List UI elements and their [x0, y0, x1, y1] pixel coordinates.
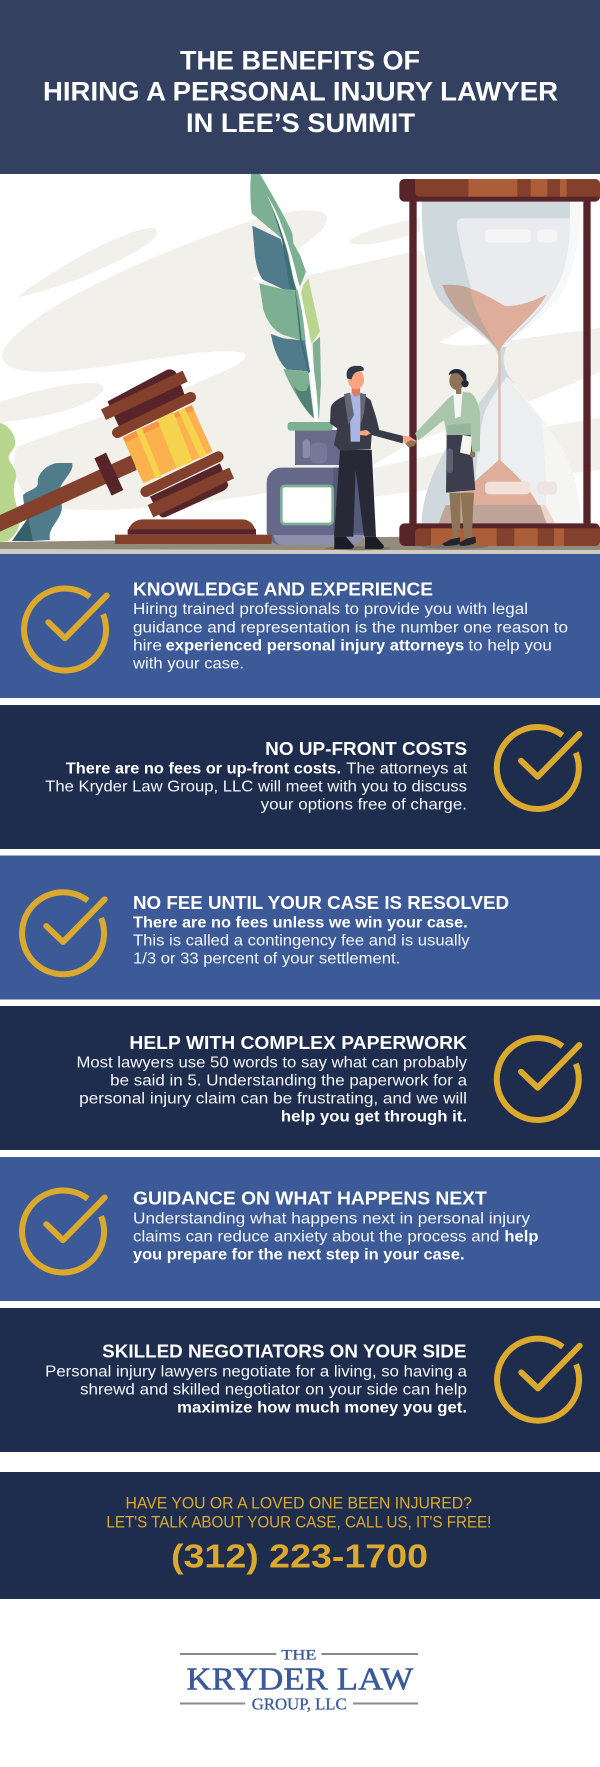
panel text [76, 1033, 467, 1125]
panel text: Personal injury lawyers negotiate for a living, so having a [45, 1363, 467, 1380]
call to action text [106, 1493, 491, 1531]
glass bulb [422, 202, 580, 523]
panel text: guidance and representation is the number one reason to [133, 619, 568, 636]
panel text: HELP WITH COMPLEX PAPERWORK [129, 1033, 467, 1053]
logo: The Kryder Law Group: GROUP, LLC [252, 1694, 347, 1713]
bottom cap [399, 523, 600, 546]
panel text: This is called a contingency fee and is usually [133, 932, 470, 949]
panel text: personal injury claim can be frustrating, and we will [79, 1090, 467, 1107]
panel text [45, 1342, 467, 1416]
panel: guidance on what happens next [0, 1157, 600, 1301]
panel: knowledge and experience [0, 554, 600, 698]
panel text: help you get through it. [281, 1108, 467, 1125]
hero illustration [0, 174, 600, 554]
panel text: Understanding what happens next in personal injury [133, 1210, 530, 1227]
call to action panel [0, 1472, 600, 1599]
panel: help with complex paperwork [0, 1006, 600, 1150]
panel text: experienced personal injury attorneys [166, 637, 464, 654]
feather [250, 174, 321, 422]
hourglass [399, 179, 600, 546]
panel text: maximize how much money you get. [177, 1399, 467, 1416]
panel text: Hiring trained professionals to provide you with legal [133, 601, 528, 618]
icon: check mark [22, 892, 105, 974]
panel text: be said in 5. Understanding the paperwork for a [110, 1072, 467, 1089]
panel text: hire [133, 637, 162, 654]
panel text [132, 580, 568, 672]
panel text: Most lawyers use 50 words to say what can probably [76, 1054, 467, 1071]
panel: skilled negotiators on your side [0, 1308, 600, 1452]
sand [439, 285, 555, 523]
phone number: (312) 223-1700 [171, 1538, 428, 1575]
panel text: to help you [468, 637, 552, 654]
panel text: 1/3 or 33 percent of your settlement. [133, 950, 400, 967]
woman in green [405, 369, 488, 549]
panel text: SKILLED NEGOTIATORS ON YOUR SIDE [102, 1342, 466, 1362]
panel text: GUIDANCE ON WHAT HAPPENS NEXT [133, 1189, 487, 1209]
panel text: There are no fees or up-front costs. [66, 760, 341, 777]
call to action text: HAVE YOU OR A LOVED ONE BEEN INJURED? [126, 1493, 472, 1512]
panel text: The Kryder Law Group, LLC will meet with you to discuss [45, 778, 467, 795]
panel text [133, 1189, 538, 1263]
logo: The Kryder Law Group: KRYDER LAW [186, 1661, 414, 1697]
icon: check mark [497, 1339, 580, 1421]
man in suit [325, 366, 417, 550]
panel: no up-front costs [0, 705, 600, 849]
icon: check mark [497, 727, 579, 809]
panel text [133, 893, 509, 967]
header panel with title: THE BENEFITS OF [180, 45, 420, 75]
logo: The Kryder Law Group [180, 1647, 418, 1713]
panel text: your options free of charge. [261, 796, 467, 813]
panel text: NO FEE UNTIL YOUR CASE IS RESOLVED [133, 893, 509, 913]
gavel [0, 370, 234, 532]
ink bottle [267, 422, 365, 545]
header panel with title [0, 0, 600, 174]
panel text: help [504, 1228, 538, 1245]
posts [409, 200, 591, 525]
ground [0, 535, 600, 554]
panel text: KNOWLEDGE AND EXPERIENCE [133, 580, 433, 600]
icon: check mark [497, 1038, 579, 1120]
glass highlights [485, 229, 557, 494]
panel text [45, 739, 468, 813]
icon: check mark [22, 1190, 105, 1272]
illustration background blobs [0, 210, 600, 510]
panel text: The attorneys at [346, 760, 468, 777]
sound block [115, 519, 272, 544]
panel text: There are no fees unless we win your case. [133, 914, 468, 931]
icon: check mark [24, 588, 107, 670]
header panel with title: HIRING A PERSONAL INJURY LAWYER [43, 77, 558, 107]
panel: no fee until your case is resolved [0, 856, 600, 1000]
panel text: NO UP-FRONT COSTS [265, 739, 467, 759]
call to action text: LET'S TALK ABOUT YOUR CASE, CALL US, IT'S FREE! [106, 1512, 491, 1531]
panel text: you prepare for the next step in your case. [133, 1246, 465, 1263]
top cap [399, 179, 600, 202]
plants [0, 423, 72, 542]
panel text: with your case. [132, 655, 244, 672]
header panel with title: IN LEE’S SUMMIT [186, 108, 416, 138]
panel text: shrewd and skilled negotiator on your side can help [80, 1381, 467, 1398]
logo: The Kryder Law Group: THE [281, 1647, 316, 1663]
panel text: claims can reduce anxiety about the process and [133, 1228, 499, 1245]
